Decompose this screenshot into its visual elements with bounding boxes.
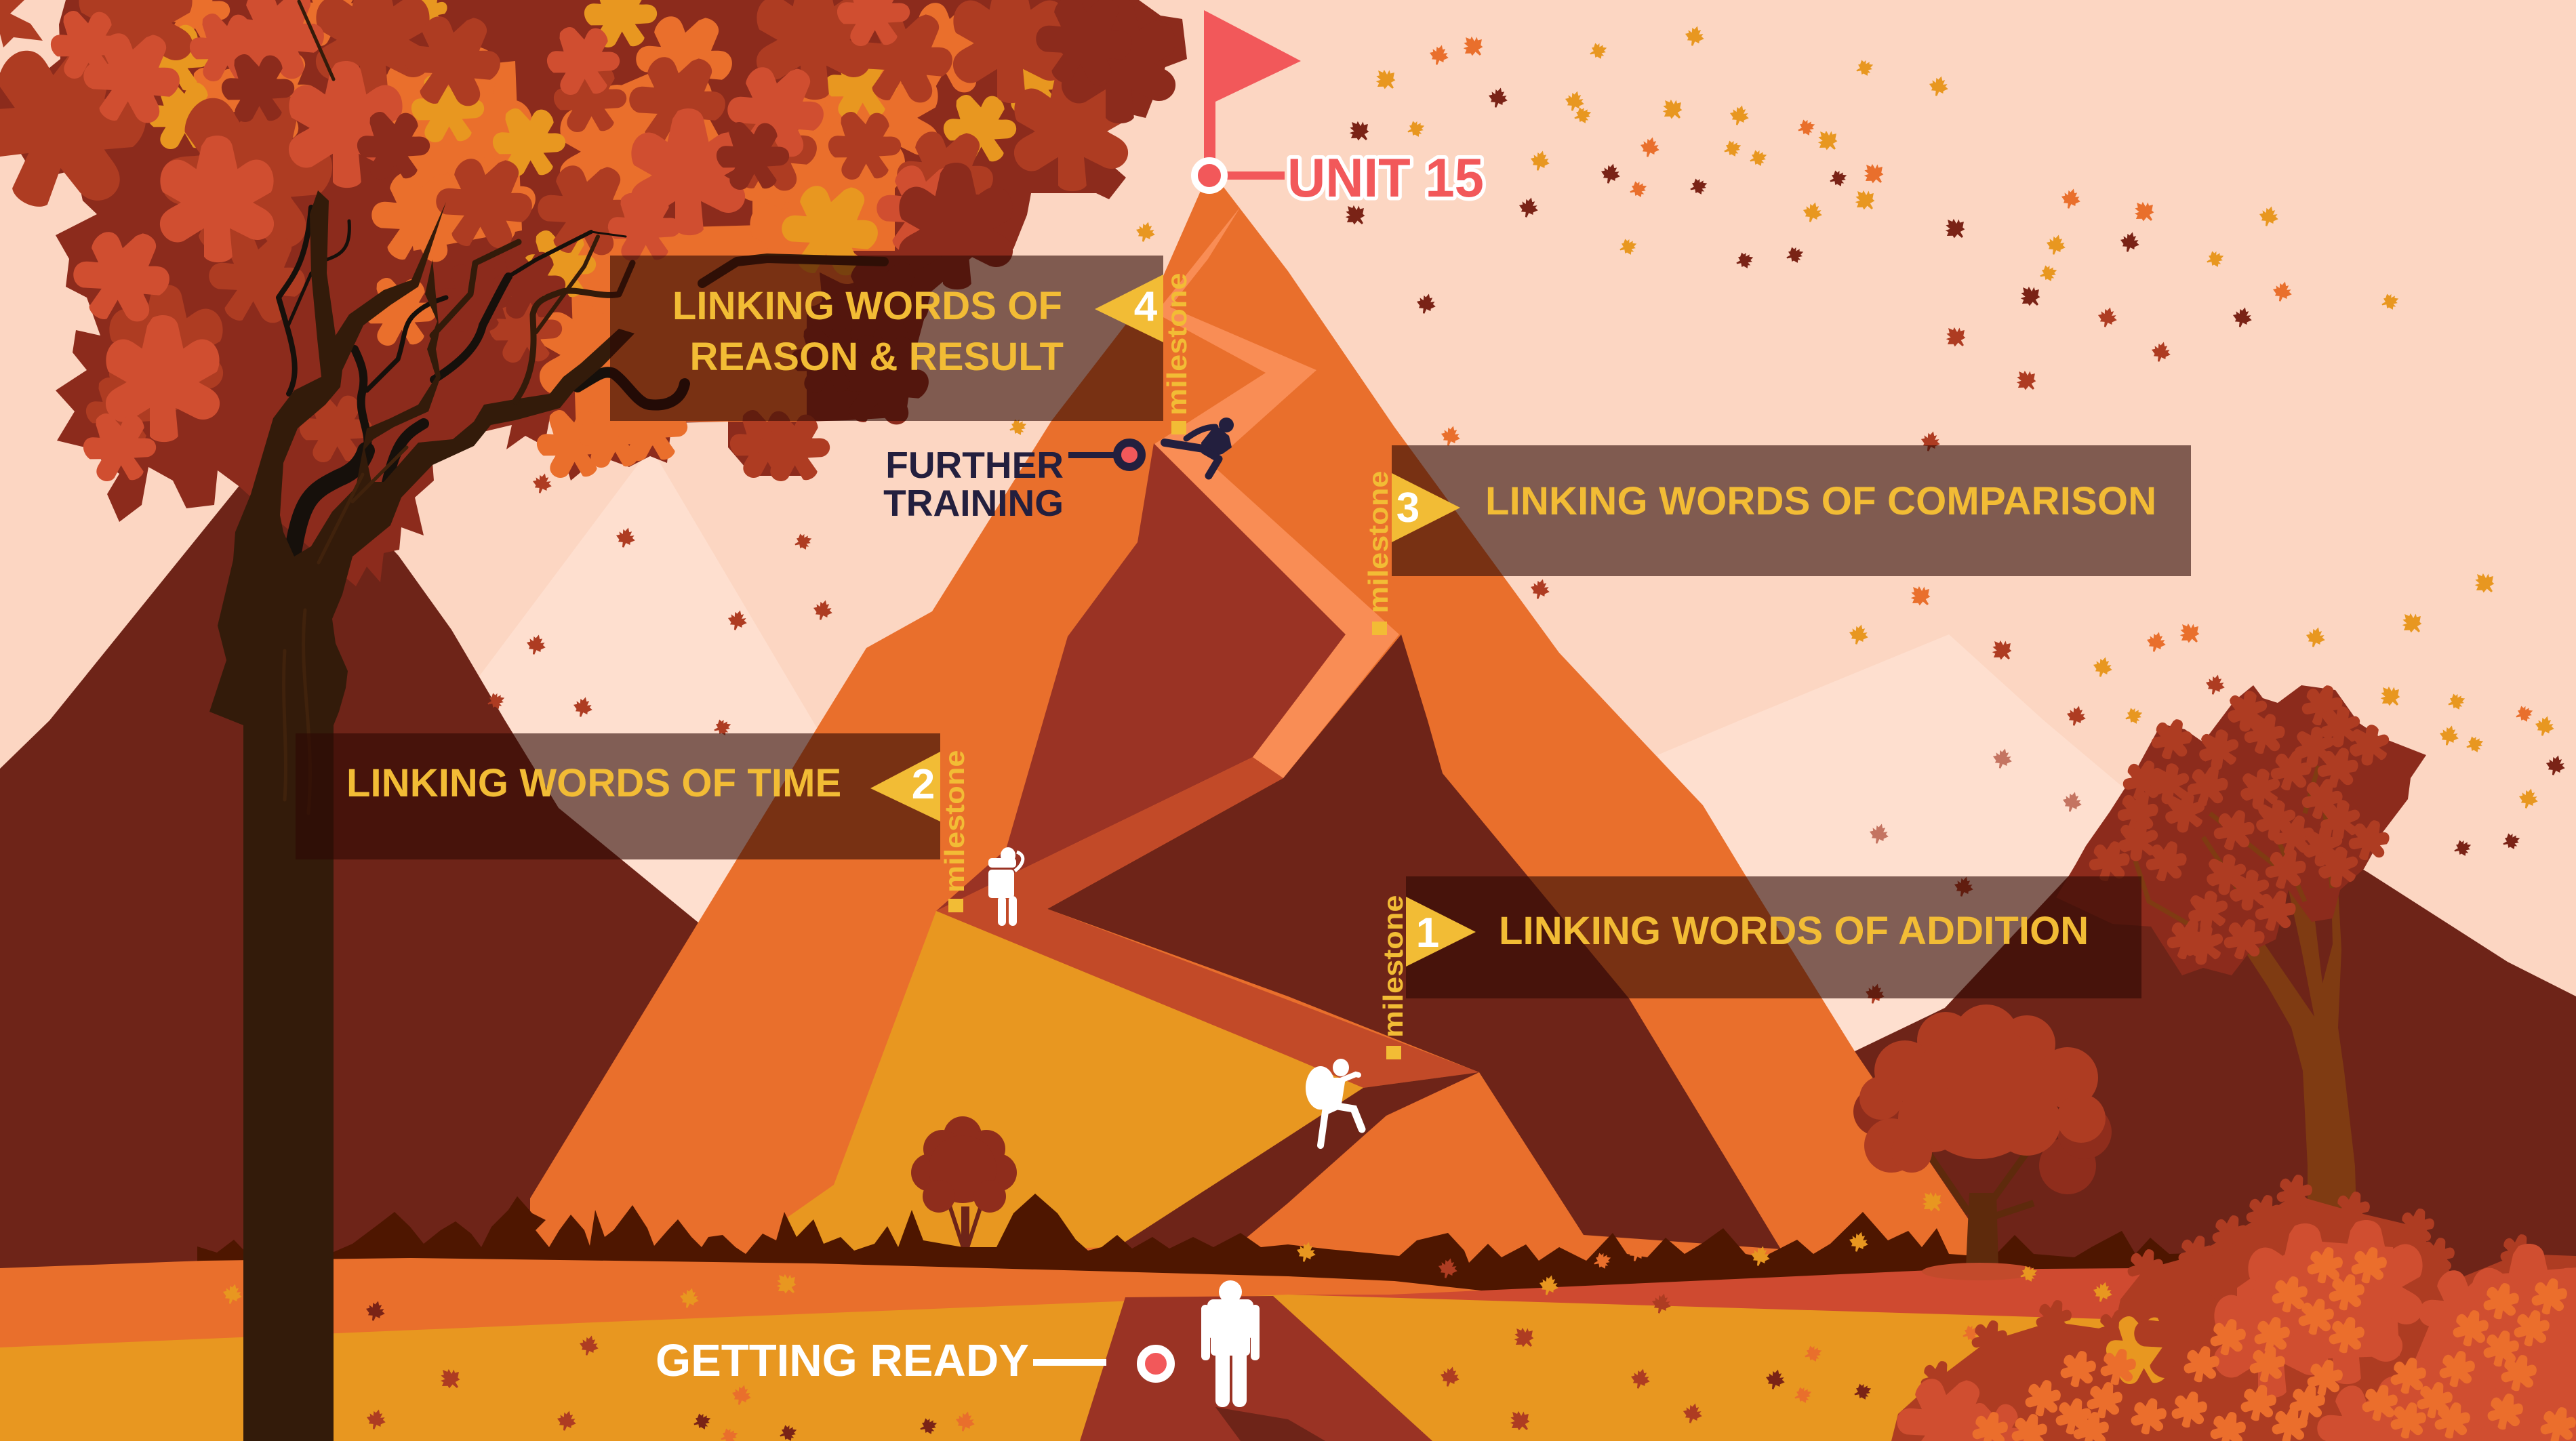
mountain lower trail <box>936 757 1479 1088</box>
mountain dark central face <box>1047 634 1781 1249</box>
ground orange band <box>0 1258 1559 1356</box>
big tree trunk and branches <box>209 190 884 1441</box>
icon: climber at milestone 2 <box>988 847 1023 926</box>
box 1 heading: LINKING WORDS OF ADDITION <box>1499 909 2089 953</box>
box 4 heading: LINKING WORDS OF <box>672 284 1062 328</box>
bushes bottom right <box>1883 1171 2576 1441</box>
road shadow <box>1215 1407 1325 1441</box>
milestone 3 bullet <box>1372 622 1387 635</box>
box 3 number: 3 <box>1396 485 1420 531</box>
small tree on slope <box>911 1116 1017 1261</box>
milestone 1 label: milestone <box>1378 895 1409 1038</box>
box 3 marker <box>1392 473 1460 542</box>
main orange mountain <box>530 169 2000 1288</box>
treeline <box>197 1194 2192 1298</box>
box 1 number: 1 <box>1416 910 1439 956</box>
milestone 4 label: milestone <box>1162 273 1193 415</box>
unit title: UNIT 15 <box>1287 148 1484 209</box>
milestone 1 bullet <box>1386 1046 1401 1059</box>
box 4 marker <box>1095 275 1163 342</box>
mountain shaded red face <box>936 443 1346 911</box>
box 2 marker <box>870 752 940 821</box>
upper light trail <box>1154 207 1399 778</box>
further training marker: FURTHER <box>885 444 1064 486</box>
box 1 marker <box>1406 897 1476 967</box>
summit flag <box>1204 10 1301 169</box>
tall tree right <box>2056 679 2426 1261</box>
summit marker and unit label <box>1194 148 1484 209</box>
icon: kicking climber <box>1165 418 1234 476</box>
further training marker: TRAINING <box>883 482 1064 524</box>
far light mountains <box>407 447 2169 1057</box>
callout box 2 <box>296 733 971 912</box>
box 4 number: 4 <box>1134 283 1158 330</box>
milestone 4 bullet <box>1171 421 1186 434</box>
getting ready marker: GETTING READY <box>656 1335 1029 1386</box>
callout box 1 <box>1378 876 2141 1059</box>
dirt road <box>1080 1296 1432 1441</box>
ground yellow field <box>0 1295 2237 1441</box>
milestone 2 label: milestone <box>940 750 971 893</box>
further training marker <box>883 443 1142 524</box>
box 2 heading: LINKING WORDS OF TIME <box>346 761 841 805</box>
callout box 3 <box>1363 445 2191 635</box>
dark ravine <box>1112 1072 1479 1254</box>
milestone 2 bullet <box>948 899 963 912</box>
medium tree right <box>1853 1004 2112 1280</box>
box 4 heading: REASON & RESULT <box>690 335 1064 379</box>
left dark mountain <box>0 434 746 1288</box>
big tree canopy <box>0 0 1187 586</box>
icon: climber at milestone 1 <box>1306 1059 1362 1145</box>
yellow slope <box>773 911 1363 1254</box>
box 3 heading: LINKING WORDS OF COMPARISON <box>1485 479 2156 523</box>
ground red band <box>1288 1267 2237 1328</box>
big tree black limbs <box>279 1 685 552</box>
box 2 number: 2 <box>912 761 935 808</box>
callout box 4 <box>610 256 1193 434</box>
icon: standing hiker <box>1201 1280 1260 1407</box>
milestone 3 label: milestone <box>1363 471 1394 613</box>
right dark mountain <box>1855 766 2576 1322</box>
